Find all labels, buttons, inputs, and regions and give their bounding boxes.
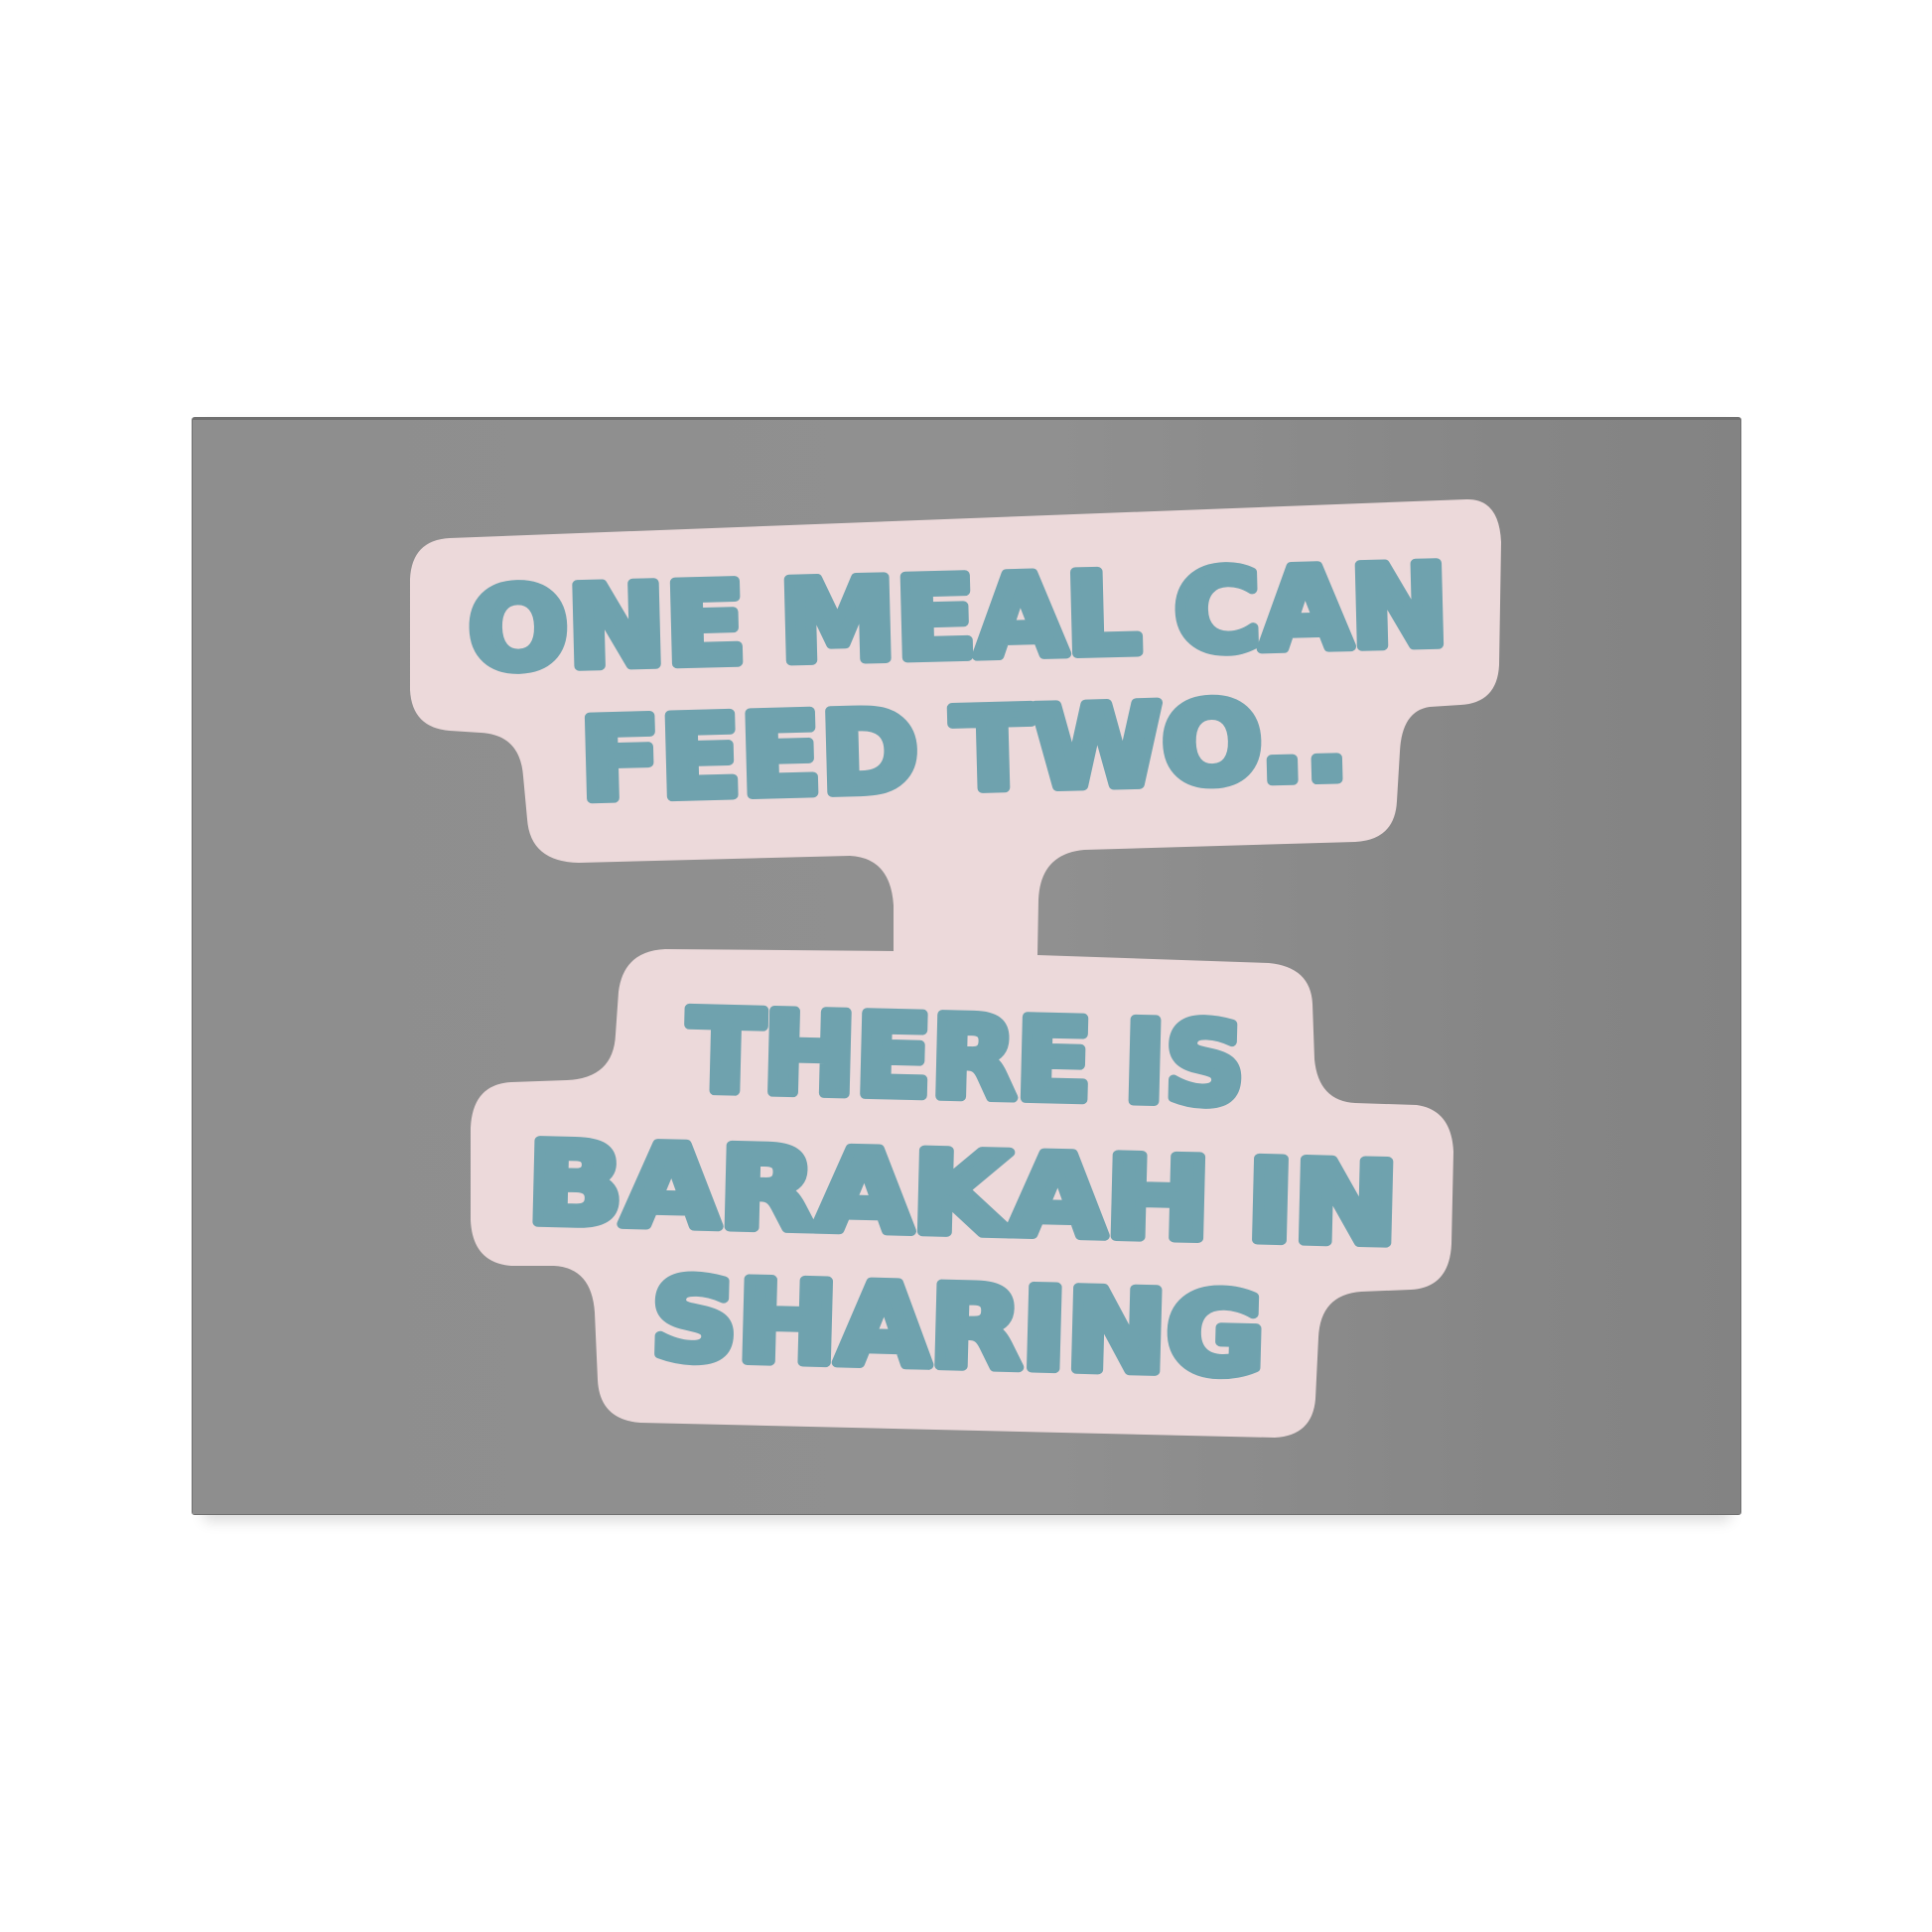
text: line 5: SHARING [649, 1256, 1266, 1401]
text: line 3: THERE IS [686, 988, 1246, 1130]
text: line 1: ONE MEAL CAN [467, 542, 1449, 695]
board shadow [204, 425, 1730, 1521]
glass cutting board [192, 417, 1741, 1515]
badge with slogan [410, 499, 1501, 1438]
pink badge shape [410, 499, 1501, 1438]
text: line 4: BARAKAH IN [526, 1120, 1400, 1270]
text: line 2: FEED TWO.. [579, 676, 1350, 825]
